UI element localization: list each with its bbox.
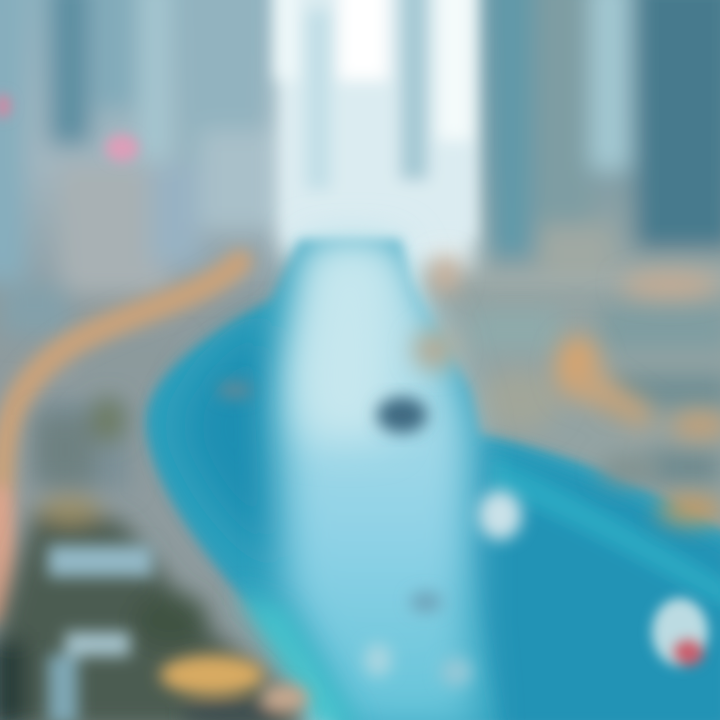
panel: muted ground under the city (0, 260, 720, 720)
panel: left embankment (40, 340, 180, 490)
icon: red and white buoy (652, 598, 708, 666)
panel: pale rooftops and warm patches (48, 545, 309, 720)
road: orange curve on the left (0, 262, 240, 610)
panel: lower left dark waterfront (0, 398, 300, 720)
panel: right embankment (470, 305, 720, 485)
panel: right orange waterfront patches (413, 255, 720, 524)
panel: left tower block (0, 0, 280, 335)
icon: central boat (377, 397, 427, 433)
river: teal water body (146, 240, 720, 720)
river: dark left channel (183, 320, 280, 565)
icon: small boats (217, 381, 522, 687)
panel: right tower block (475, 0, 720, 290)
icon: pink glows on towers (0, 94, 139, 162)
river: light central reflection (280, 240, 480, 720)
river: deep blue right channel (470, 445, 720, 720)
river: turquoise lower edge (235, 590, 360, 720)
panel: central bright sky and distant towers (275, 0, 475, 240)
